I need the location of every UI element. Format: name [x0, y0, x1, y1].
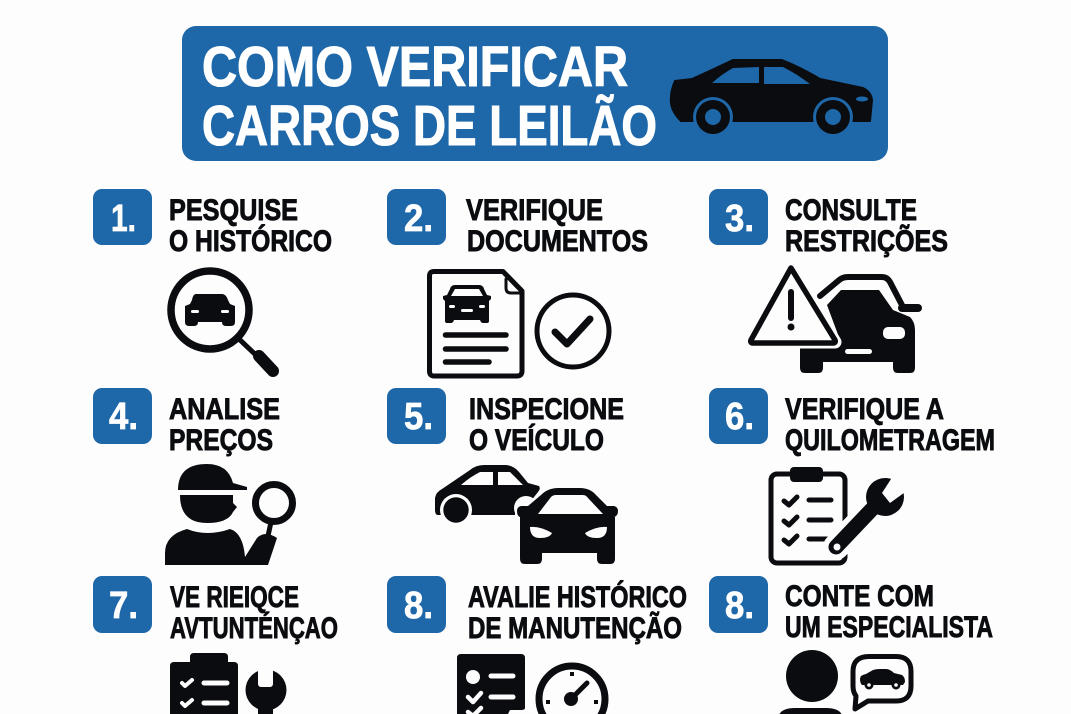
badge 8 second: 8. [725, 585, 754, 627]
icon: car side view [671, 60, 872, 137]
panel: step 7 [93, 576, 338, 714]
badge 2: 2. [404, 198, 433, 240]
badge 5 [387, 388, 446, 444]
panel: step 6 [709, 388, 995, 563]
badge 8: 8. [404, 585, 433, 627]
badge 1: 1. [111, 198, 136, 240]
badge 8 [387, 576, 446, 633]
heading 4 [169, 393, 280, 457]
heading 2 [466, 194, 648, 258]
badge 6: 6. [725, 396, 754, 438]
icon: document with car [430, 272, 522, 376]
heading 5: O VEÍCULO [469, 423, 604, 457]
heading 5: INSPECIONE [469, 393, 624, 426]
icon: warning triangle [751, 268, 835, 343]
heading 1 [169, 194, 332, 258]
icon: inspector with magnifier [165, 464, 292, 565]
icon: magnifier with car [171, 271, 273, 371]
badge 7: 7. [109, 585, 138, 627]
badge 5: 5. [404, 396, 433, 438]
heading specialist [785, 580, 993, 644]
icon: front car [517, 486, 618, 566]
panel: step 9 specialist [709, 576, 993, 714]
badge 3: 3. [725, 198, 754, 240]
heading specialist: UM ESPECIALISTA [785, 611, 993, 644]
heading 6: QUILOMETRAGEM [785, 424, 995, 457]
heading 4: PREÇOS [169, 424, 273, 457]
title: COMO VERIFICAR [202, 35, 628, 99]
icon: solid list [457, 654, 525, 714]
heading 8: DE MANUTENÇÃO [468, 611, 682, 645]
panel: step 3 [709, 189, 948, 373]
icon: wrench upright [246, 668, 286, 714]
heading 6: VERIFIQUE A [785, 393, 944, 426]
title: CARROS DE LEILÃO [202, 94, 657, 158]
heading 2: DOCUMENTOS [467, 225, 648, 258]
title banner [182, 26, 888, 161]
heading 5 [469, 393, 624, 457]
icon: check circle [537, 295, 609, 367]
panel: step 8 maintenance [387, 576, 687, 714]
icon: person [778, 650, 843, 714]
badge 3 [709, 189, 768, 245]
badge 4: 4. [109, 396, 138, 438]
icon: side car [435, 465, 540, 526]
heading 7: AVTUNTÉNÇAO [170, 611, 338, 645]
heading 4: ANALISE [169, 393, 280, 426]
badge 8 second [709, 576, 768, 633]
badge 2 [387, 189, 446, 245]
heading 6 [785, 393, 995, 457]
heading 7: VE RIEIQCE [170, 581, 299, 614]
badge 4 [93, 388, 152, 444]
panel: step 5 [387, 388, 624, 566]
badge 7 [93, 576, 152, 633]
heading 2: VERIFIQUE [466, 194, 603, 227]
heading 3: RESTRIÇÕES [785, 224, 948, 258]
icon: gauge [539, 666, 605, 714]
icon: speech bubble with car [853, 656, 911, 709]
icon: solid clipboard [170, 653, 238, 714]
panel: step 4 [93, 388, 292, 565]
heading 3 [785, 194, 948, 258]
heading 1: PESQUISE [169, 194, 298, 227]
heading 7 [170, 581, 338, 645]
title [202, 35, 657, 158]
icon: wrench [834, 476, 908, 550]
heading 1: O HISTÓRICO [169, 224, 332, 258]
panel: step 2 [387, 189, 648, 376]
heading 3: CONSULTE [785, 194, 917, 227]
badge 6 [709, 388, 768, 444]
heading 8: AVALIE HISTÓRICO [468, 580, 687, 614]
icon: checklist [771, 467, 845, 563]
icon: car with raised hood [800, 277, 918, 373]
heading specialist: CONTE COM [785, 580, 934, 613]
panel: step 1 [93, 189, 332, 371]
badge 1 [93, 189, 152, 245]
heading 8 [468, 580, 687, 645]
